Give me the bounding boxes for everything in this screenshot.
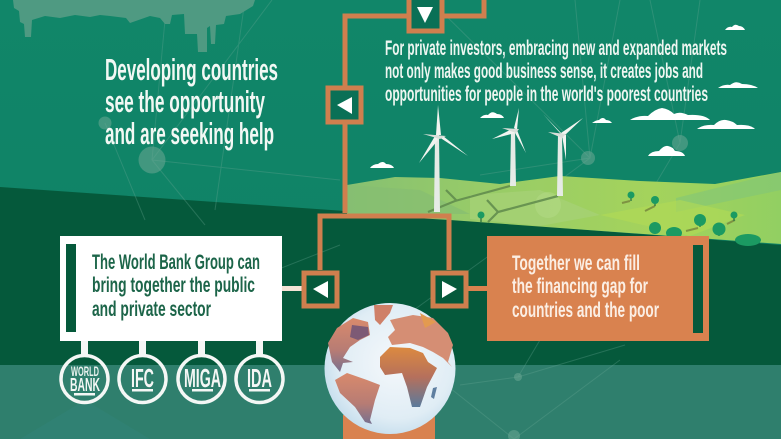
badge: IDA: IDA [247,363,272,393]
background: dark green band [0,187,781,366]
panel: World Bank Group: The World Bank Group can [92,251,260,274]
network nodes [98,116,688,439]
badge: MIGA: MIGA [184,363,221,393]
connector: white box link [282,286,302,291]
background: lower teal band [0,365,781,439]
wind turbine 3 [543,114,583,196]
globe [324,303,456,434]
arrow box: right lower [433,273,466,306]
heading: developing countries: Developing countries [105,52,278,87]
private investors text [385,37,727,106]
clouds [370,25,758,168]
green hills [347,172,781,244]
globe pedestal [343,415,435,439]
badge: IFC [119,341,166,402]
wind turbine 1 [419,105,468,212]
heading: developing countries: see the opportunity [105,84,265,119]
north america [328,318,370,372]
panel: together: countries and the poor [512,299,659,322]
orange connector lines [320,0,484,270]
africa [380,347,437,407]
badge: IFC: IFC [131,363,154,393]
panel: together: Together we can fill [512,252,640,275]
badge: World Bank [61,341,108,402]
panel: World Bank Group [60,236,282,341]
turbine shadows [428,186,558,222]
arrow box: left upper [328,88,361,122]
arrow box: down [409,0,442,31]
hudson shadow [350,325,369,340]
network lines [105,0,700,439]
trees [478,192,761,246]
panel: World Bank Group: bring together the public [92,274,255,297]
asia highlight [420,313,436,328]
panel: together: the financing gap for [512,275,648,298]
south america [335,373,380,424]
eurasia [388,315,453,367]
panel: together [487,236,709,341]
badge: MIGA [178,341,225,402]
connector: orange box link [468,286,488,291]
greenland [374,305,393,325]
arrow box: left lower [304,273,337,306]
badge: World Bank: WORLD [71,363,99,379]
panel: World Bank Group: and private sector [92,298,211,321]
wind turbine 2 [492,108,526,186]
heading: developing countries [105,52,278,151]
badge: IDA [236,341,283,402]
skyline silhouette [13,0,255,52]
badge: World Bank: BANK [70,375,100,395]
lower band faint triangles [20,400,150,439]
madagascar [431,387,437,399]
heading: developing countries: and are seeking help [105,116,274,151]
